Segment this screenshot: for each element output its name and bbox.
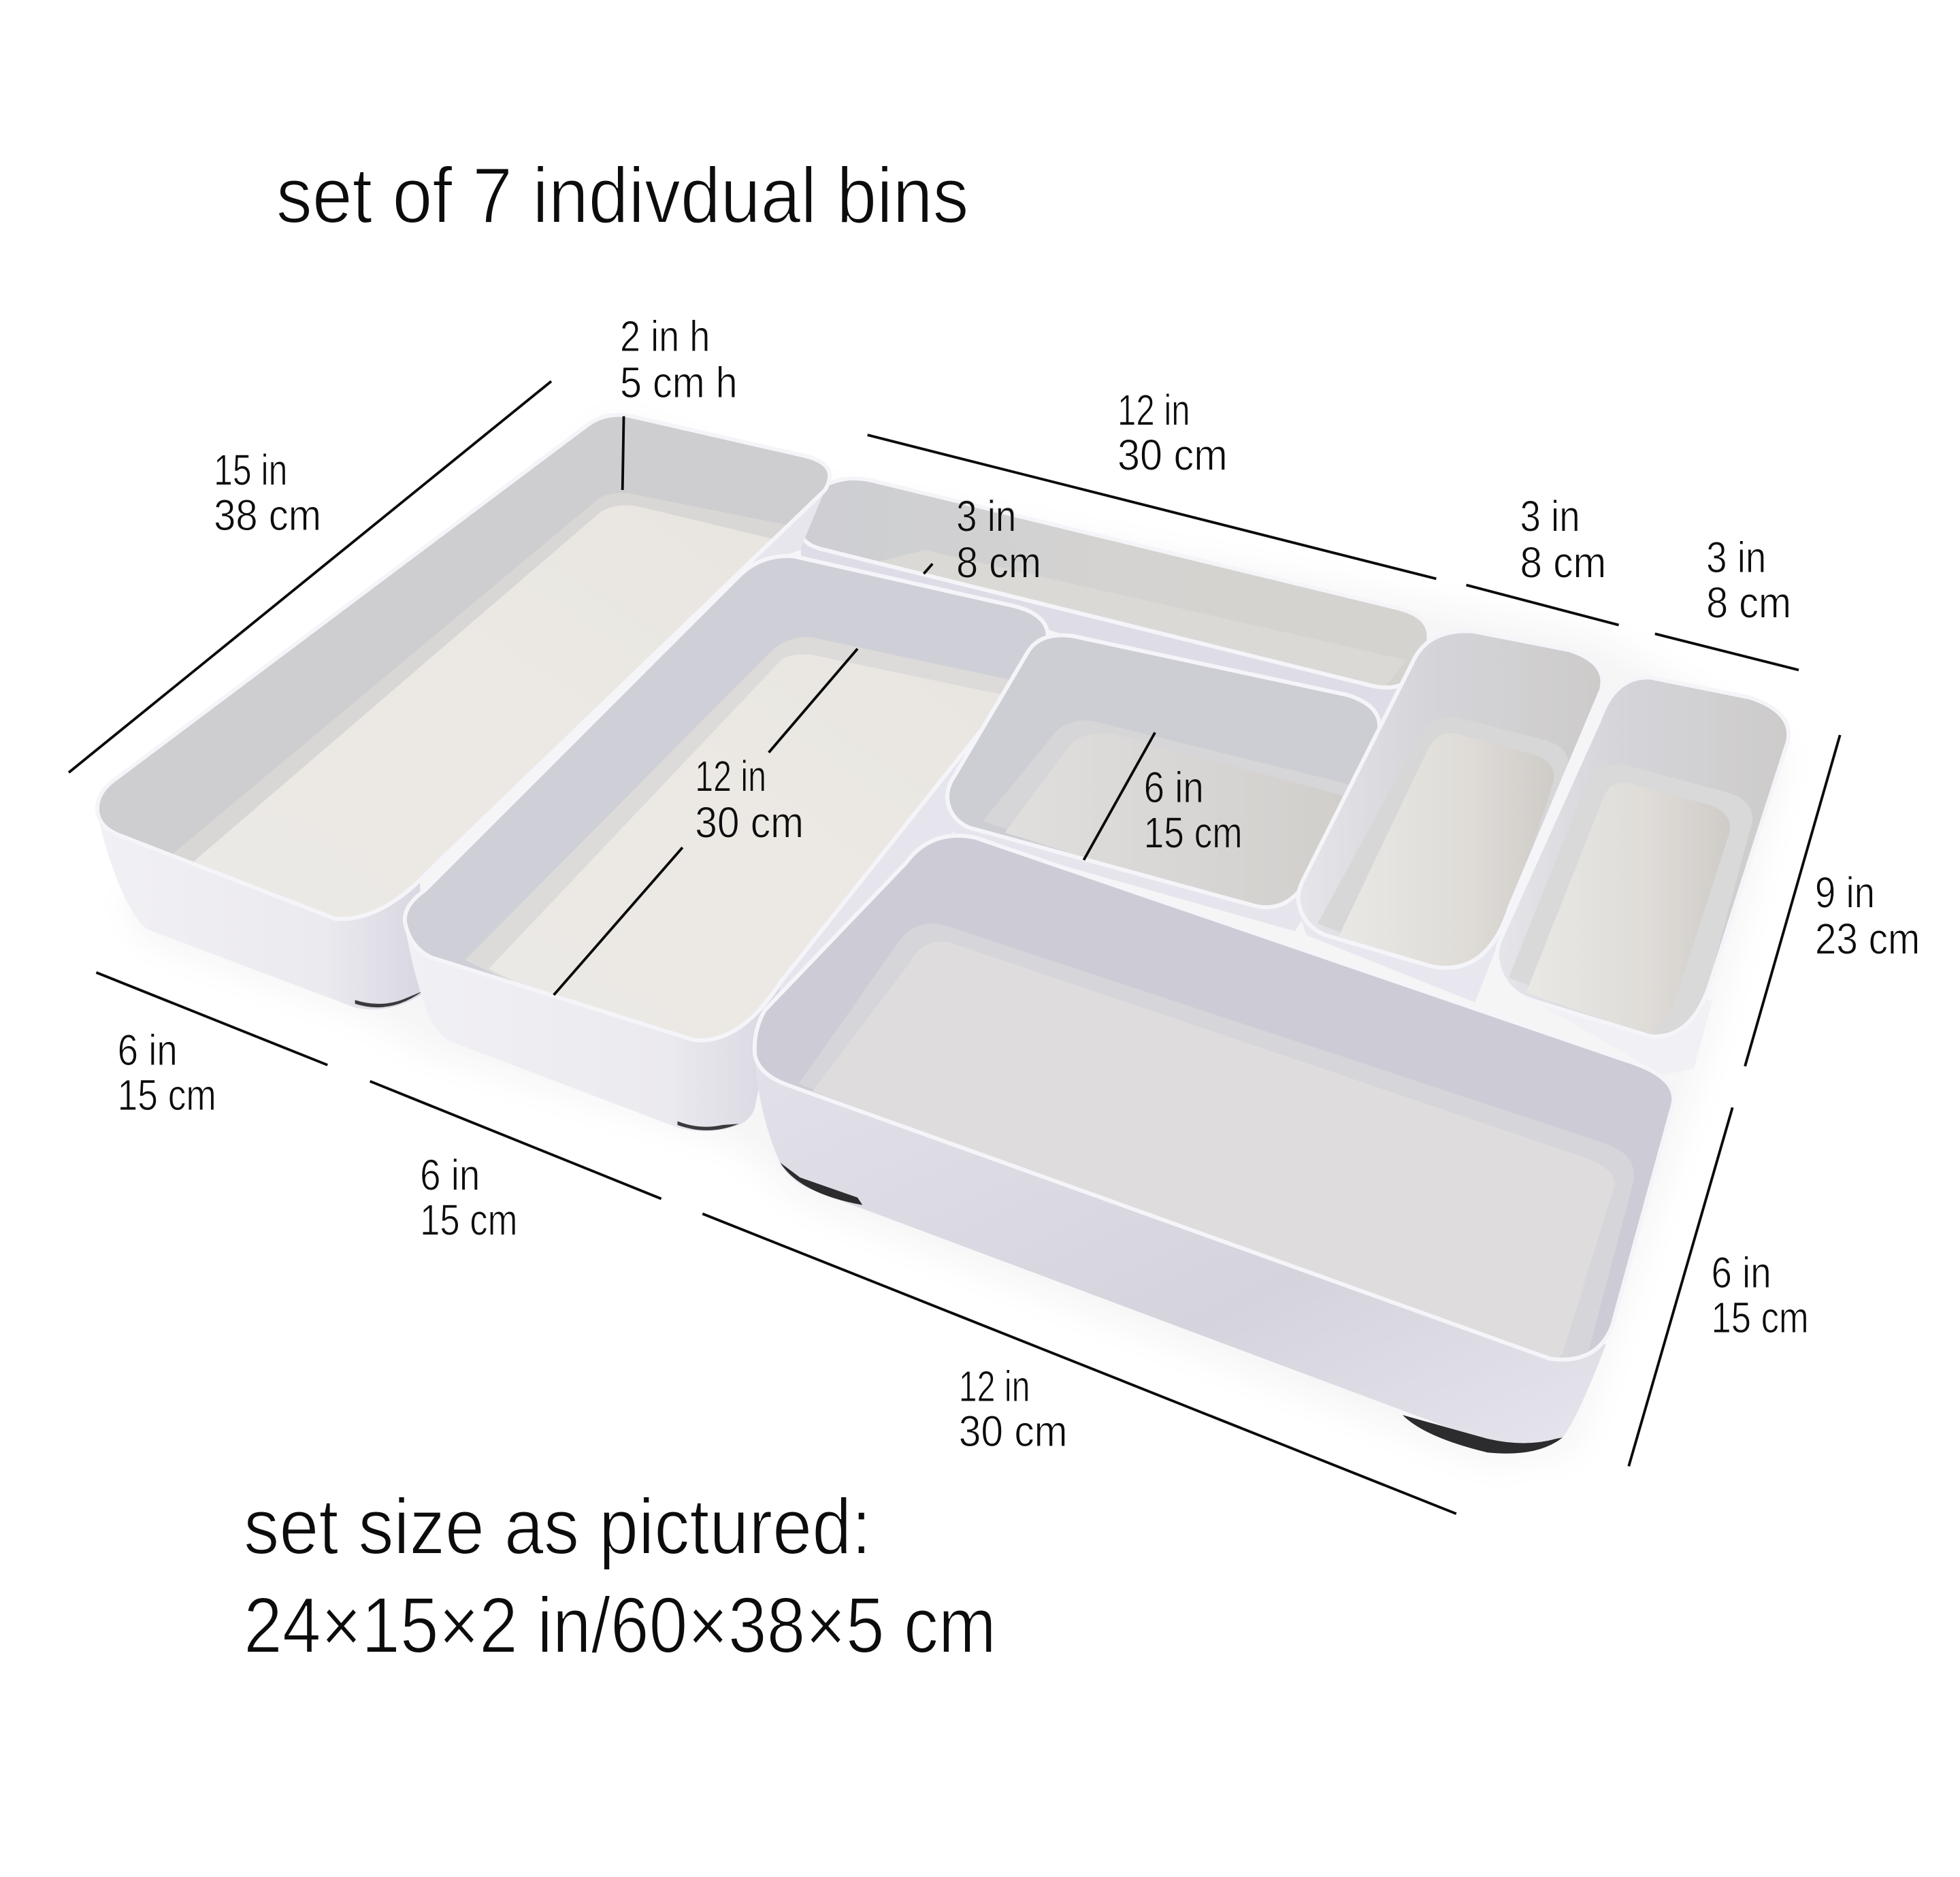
label: bottom 6 in left: 6 in bbox=[118, 1026, 178, 1075]
label: inner 6 in bbox=[1144, 763, 1243, 857]
dimension line: inner 12 in lower bbox=[554, 847, 683, 995]
label: top 3 in left bbox=[1520, 492, 1606, 587]
label: inner 6 in: 6 in bbox=[1144, 763, 1204, 812]
label: back 12 in bbox=[1117, 385, 1228, 480]
label: right 6 in: 15 cm bbox=[1711, 1293, 1809, 1342]
label: top 3 in right: 8 cm bbox=[1706, 578, 1791, 627]
dimension line: bottom 6 in left bbox=[96, 973, 327, 1065]
label: bottom 6 in middle bbox=[420, 1151, 517, 1245]
label: bottom 12 in: 30 cm bbox=[959, 1407, 1068, 1456]
dimension line: 3 in tick bbox=[924, 564, 932, 574]
label: 2 in h: 2 in h bbox=[620, 312, 710, 361]
dimension line: 2 in height bbox=[623, 417, 624, 490]
label: bottom 12 in: 12 in bbox=[959, 1362, 1030, 1411]
label: top 3 in left: 3 in bbox=[1520, 492, 1580, 541]
label: right 9 in: 23 cm bbox=[1815, 914, 1920, 963]
foot: front left bbox=[780, 1162, 862, 1205]
bin: narrow 3 in right bbox=[1497, 677, 1788, 1075]
bin: center box 6 in bbox=[947, 635, 1388, 931]
label: back 12 in: 30 cm bbox=[1117, 431, 1228, 480]
product photo: seven bins bbox=[97, 415, 1788, 1454]
dimension line: 15 in bbox=[69, 381, 551, 772]
soft floor shadow bbox=[125, 419, 1788, 1463]
set size caption bbox=[244, 1482, 996, 1669]
label: back 12 in: 12 in bbox=[1117, 385, 1190, 434]
label: bottom 6 in middle: 15 cm bbox=[420, 1196, 517, 1245]
dimension line: right 6 in bbox=[1629, 1107, 1733, 1466]
bin: narrow 3 in left bbox=[1298, 631, 1603, 1002]
dimension line: back 12 in bbox=[868, 435, 1436, 578]
dimension line: top 3 in right bbox=[1655, 634, 1799, 670]
label: inner 12 in bbox=[695, 752, 804, 847]
label: 15 in bbox=[214, 446, 321, 540]
dimension line: inner 6 in bbox=[1083, 732, 1155, 860]
dimension line: bottom 12 in bbox=[702, 1213, 1456, 1514]
dimension line: bottom 6 in middle bbox=[370, 1081, 662, 1198]
label: top 3 in right bbox=[1706, 533, 1791, 627]
label: back bin 3 in: 3 in bbox=[956, 492, 1016, 541]
set size caption: 24×15×2 in/60×38×5 cm bbox=[244, 1581, 996, 1669]
label: bottom 6 in left bbox=[118, 1026, 216, 1120]
label: back bin 3 in bbox=[956, 492, 1041, 587]
bin: long left 15 in bbox=[97, 415, 850, 1009]
title: set of 7 indivdual bins bbox=[276, 151, 968, 240]
label: right 9 in bbox=[1815, 868, 1920, 963]
label: top 3 in right: 3 in bbox=[1706, 533, 1766, 582]
set size caption: set size as pictured: bbox=[244, 1482, 871, 1571]
label: inner 12 in: 30 cm bbox=[695, 798, 804, 847]
label: 15 in: 38 cm bbox=[214, 491, 321, 540]
dimension line: top 3 in left bbox=[1466, 585, 1619, 625]
dimension line: right 9 in bbox=[1745, 735, 1840, 1066]
foot: front right bbox=[1403, 1415, 1563, 1454]
label: inner 12 in: 12 in bbox=[695, 752, 766, 801]
label: right 9 in: 9 in bbox=[1815, 868, 1875, 917]
label: back bin 3 in: 8 cm bbox=[956, 538, 1041, 587]
label: inner 6 in: 15 cm bbox=[1144, 808, 1243, 857]
dimension line: inner 12 in upper bbox=[769, 649, 858, 753]
bin: long center 12 in bbox=[405, 556, 1075, 1131]
label: right 6 in: 6 in bbox=[1711, 1248, 1771, 1297]
label: bottom 6 in middle: 6 in bbox=[420, 1151, 480, 1200]
bin: long back 12 in bbox=[800, 478, 1429, 730]
bin: big front 12 in bbox=[755, 836, 1673, 1454]
label: right 6 in bbox=[1711, 1248, 1809, 1342]
label: 2 in h: 5 cm h bbox=[620, 358, 738, 407]
label: 15 in: 15 in bbox=[214, 446, 287, 495]
label: bottom 12 in bbox=[959, 1362, 1068, 1456]
label: bottom 6 in left: 15 cm bbox=[118, 1071, 216, 1120]
label: 2 in h bbox=[620, 312, 738, 407]
label: top 3 in left: 8 cm bbox=[1520, 538, 1606, 587]
